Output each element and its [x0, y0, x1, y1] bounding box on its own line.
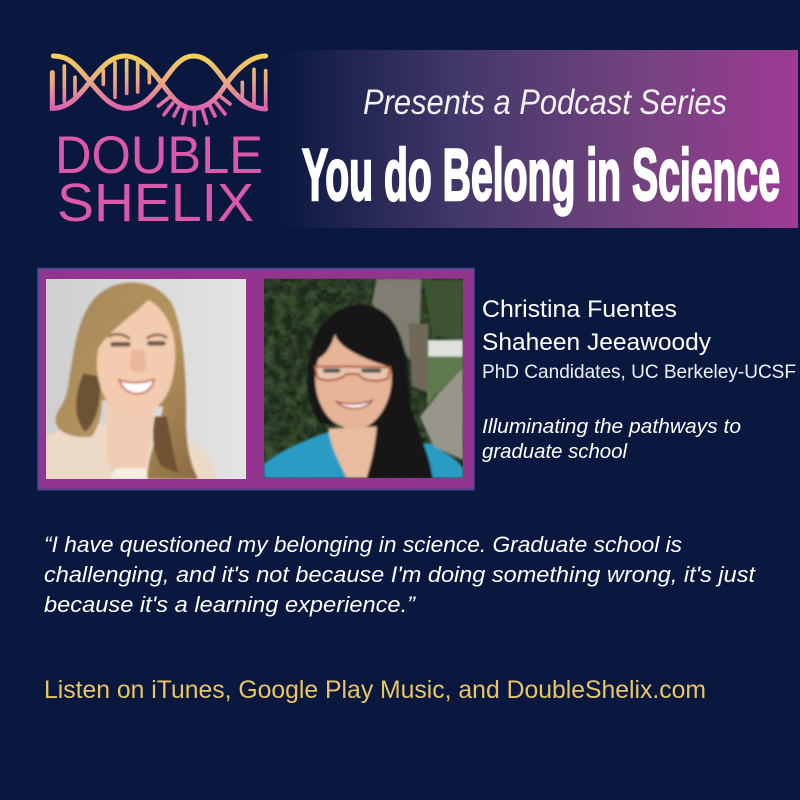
quote — [44, 532, 756, 617]
quote: challenging, and it's not because I'm doing something wrong, it's just — [44, 562, 756, 587]
quote: because it's a learning experience.” — [44, 592, 417, 617]
icon: DNA helix with eyelashes — [52, 56, 266, 125]
portrait: Christina Fuentes — [46, 279, 246, 479]
portrait: Shaheen Jeeawoody — [264, 279, 463, 478]
topic line one: Illuminating the pathways to — [482, 415, 741, 438]
title banner — [280, 50, 798, 228]
panel: portrait photos — [38, 269, 474, 490]
infographic canvas — [37, 50, 798, 703]
name: Shaheen Jeeawoody: Shaheen Jeeawoody — [482, 329, 712, 356]
call to action: Listen on iTunes, Google Play Music, and DoubleShelix.com — [44, 676, 706, 704]
affiliation: PhD Candidates, UC Berkeley-UCSF — [482, 361, 796, 383]
subtitle: Presents a Podcast Series — [363, 83, 727, 122]
photo frame — [38, 269, 474, 490]
logo: Double Shelix — [52, 56, 266, 233]
name: Christina Fuentes: Christina Fuentes — [482, 296, 677, 323]
topic line two: graduate school — [482, 440, 628, 463]
banner gradient panel — [280, 50, 798, 228]
text block: guest names and affiliation — [482, 296, 796, 463]
logo wordmark: SHELIX: SHELIX — [57, 173, 254, 233]
quote: “I have questioned my belonging in science. Graduate school is — [44, 532, 682, 557]
logo wordmark: DOUBLE: DOUBLE — [55, 126, 263, 185]
